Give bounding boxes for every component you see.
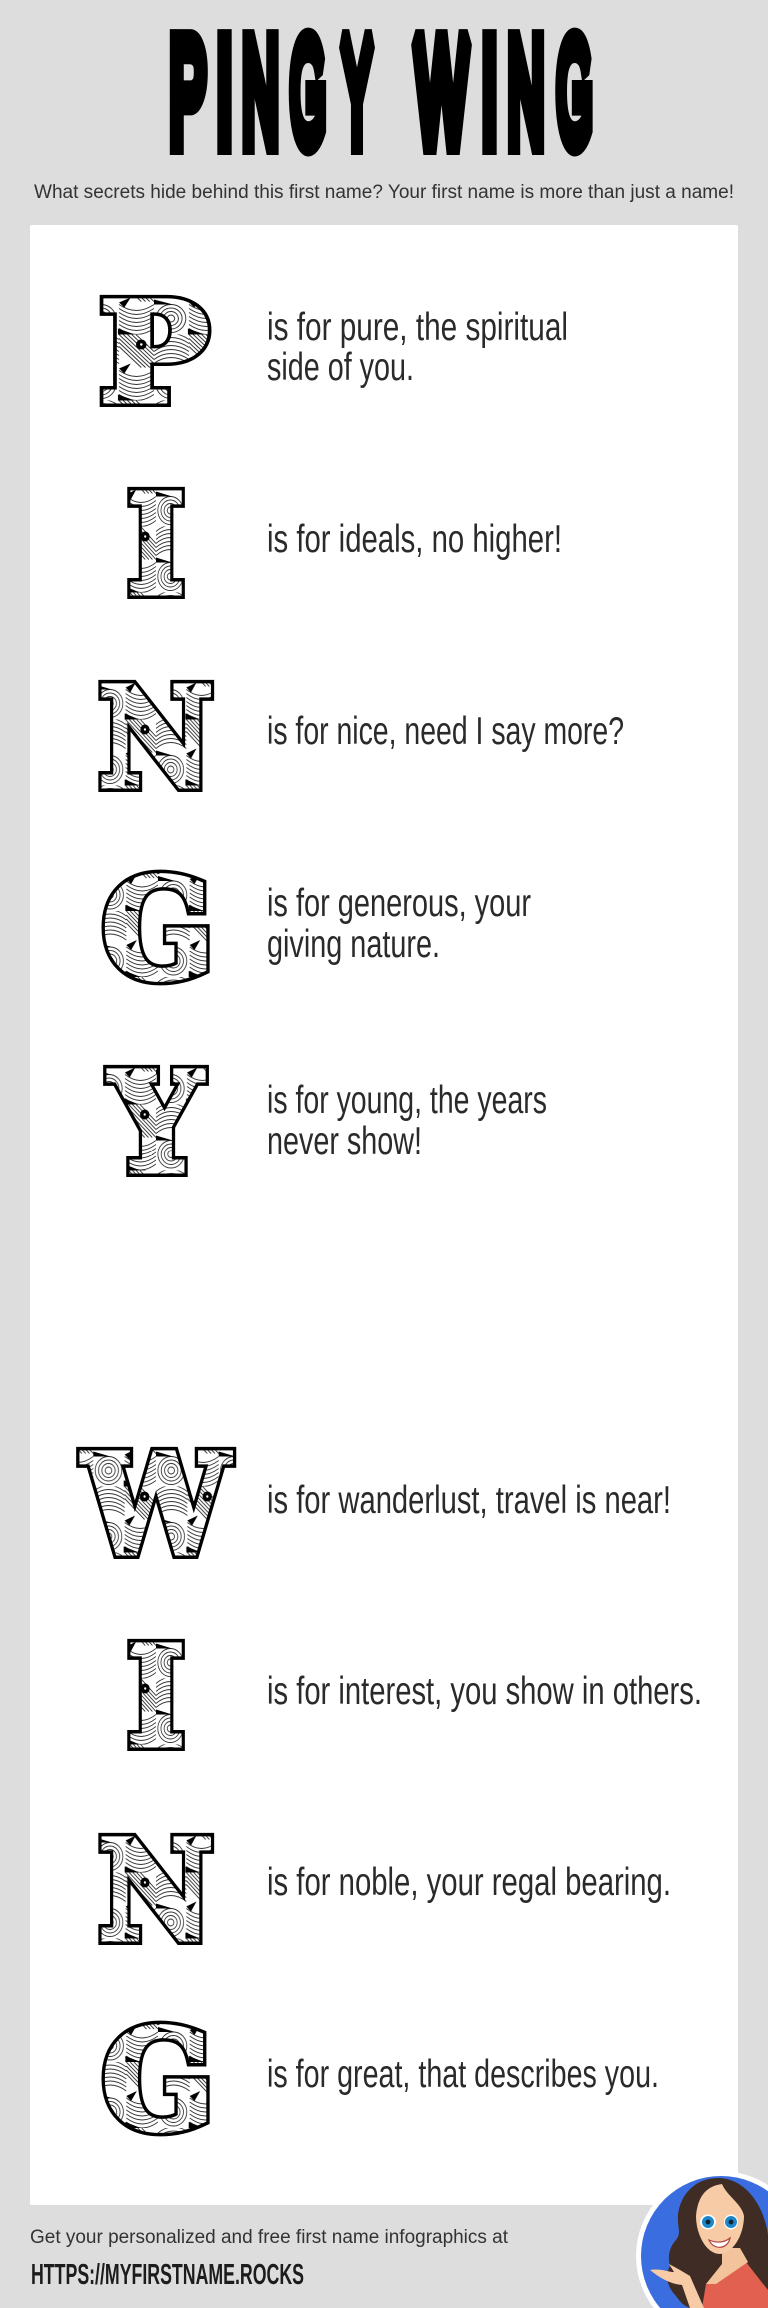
icon: letter N: N bbox=[99, 657, 213, 818]
row: I bbox=[127, 465, 562, 625]
row: P bbox=[100, 273, 568, 433]
footer url: HTTPS://MYFIRSTNAME.ROCKS bbox=[31, 2259, 304, 2291]
icon: letter Y: Y bbox=[108, 1044, 203, 1203]
icon: letter N: N bbox=[99, 1810, 213, 1971]
icon: letter W: W bbox=[82, 1425, 231, 1585]
icon: letter G: G bbox=[102, 850, 214, 1010]
row: N second bbox=[99, 1810, 671, 1971]
title: P bbox=[170, 9, 206, 175]
footer text: Get your personalized and free first name infographics at bbox=[30, 2227, 509, 2248]
text: Y line: never show! bbox=[267, 1120, 422, 1163]
icon: letter I: I bbox=[127, 1617, 185, 1777]
icon: avatar woman bbox=[636, 2171, 768, 2308]
icon: letter P: P bbox=[100, 273, 208, 433]
subtitle: What secrets hide behind this first name? Your first name is more than just a name! bbox=[34, 182, 734, 203]
icon: letter W: W bbox=[82, 1425, 231, 1585]
icon: letter I: I bbox=[127, 1617, 185, 1777]
row: G bbox=[102, 850, 531, 1010]
title: N bbox=[508, 10, 544, 175]
icon: letter G: G bbox=[102, 2001, 214, 2161]
title: W bbox=[415, 9, 468, 175]
icon: letter G: G bbox=[102, 2001, 214, 2161]
panel: white content card bbox=[30, 225, 738, 2205]
text: I line: is for ideals, no higher! bbox=[267, 518, 562, 561]
row: G second bbox=[102, 2001, 659, 2161]
text: P line: is for pure, the spiritual bbox=[267, 306, 568, 349]
icon: letter I: I bbox=[127, 465, 185, 625]
icon: letter Y: Y bbox=[108, 1044, 203, 1203]
title: G bbox=[557, 11, 592, 175]
row: W bbox=[82, 1425, 671, 1585]
icon: letter I: I bbox=[127, 465, 185, 625]
row: I second bbox=[127, 1617, 702, 1777]
title: G bbox=[290, 11, 326, 175]
title: Y bbox=[341, 11, 373, 175]
title: I bbox=[482, 9, 497, 175]
row: Y bbox=[108, 1044, 547, 1203]
title: I bbox=[217, 9, 232, 175]
text: G line: is for generous, your bbox=[267, 882, 531, 925]
icon: letter G: G bbox=[102, 850, 214, 1010]
title bbox=[170, 9, 592, 175]
icon: letter N: N bbox=[99, 657, 213, 818]
text: Y line: is for young, the years bbox=[267, 1079, 547, 1122]
icon: letter P: P bbox=[100, 273, 208, 433]
text: N line: is for nice, need I say more? bbox=[267, 710, 624, 753]
icon: letter N: N bbox=[99, 1810, 213, 1971]
text: G line: giving nature. bbox=[267, 923, 440, 966]
text: P line: side of you. bbox=[267, 346, 414, 389]
title: N bbox=[242, 10, 279, 175]
row: N bbox=[99, 657, 624, 818]
